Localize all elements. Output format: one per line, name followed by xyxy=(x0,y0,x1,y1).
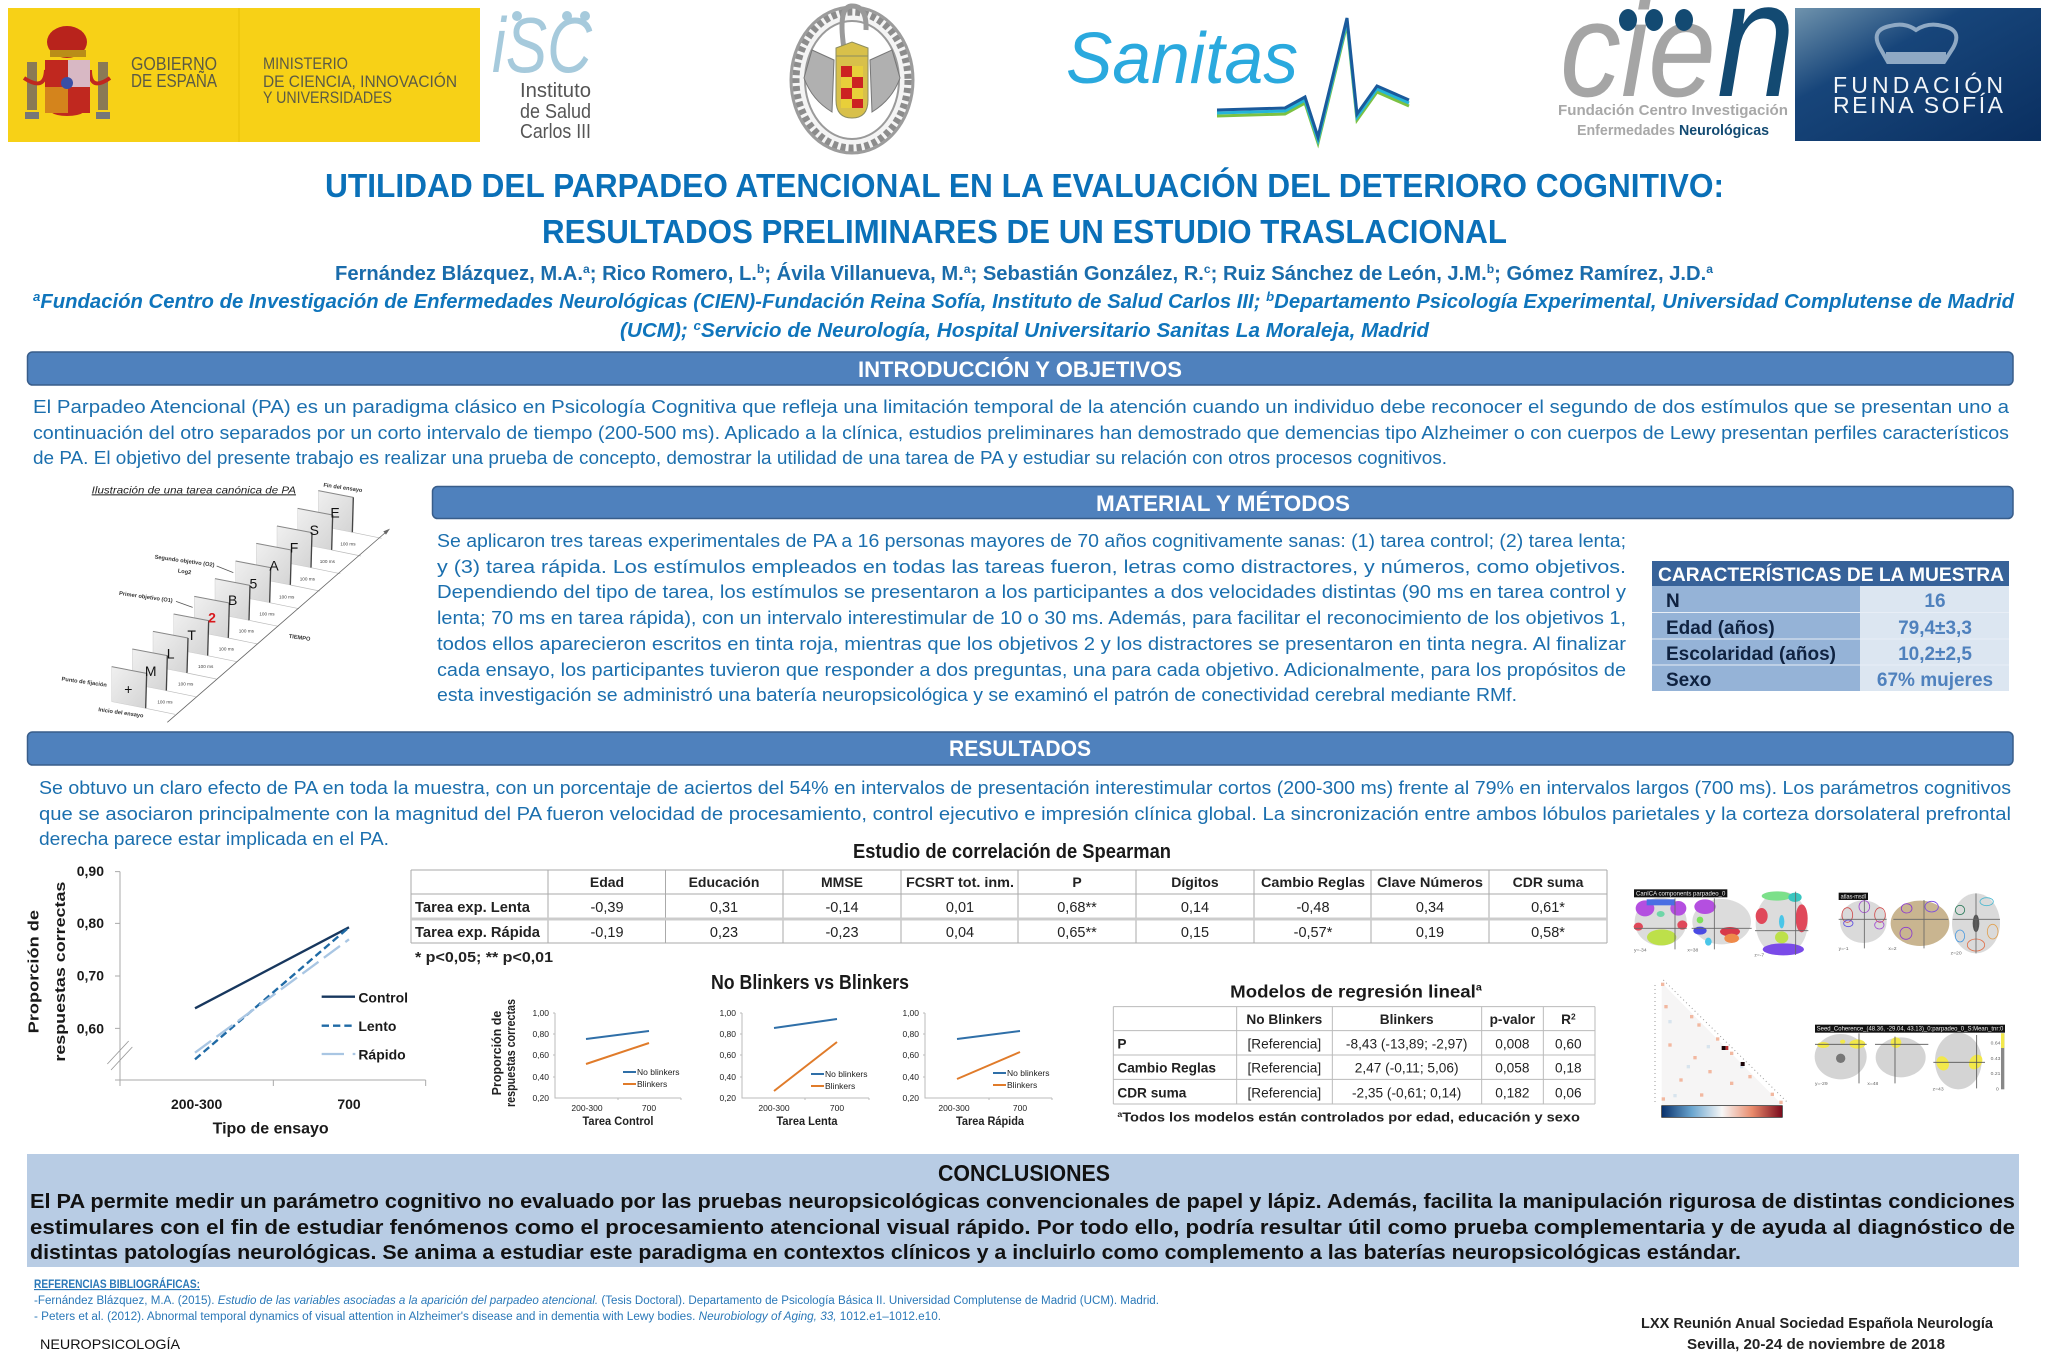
illustration: tarea canónica de PA: Log2 xyxy=(177,568,192,576)
text: introducción xyxy=(33,396,2010,468)
text: resultados: que se asociaron principalmente con la magnitud del PA fueron velocidad de procesamiento, control ejecutivo e impresión clínica global. La sincronización entre ambos lóbulos parietales y la corteza dorsolateral prefrontal xyxy=(39,803,2011,824)
table: correlación de Spearman: Clave Números xyxy=(1377,874,1483,890)
line chart: proporción de respuestas correctas: 0,60 xyxy=(77,1020,104,1036)
line chart: proporción de respuestas correctas xyxy=(26,863,426,1137)
table: correlación de Spearman: -0,23 xyxy=(825,925,859,941)
table: correlación de Spearman: -0,57* xyxy=(1294,925,1333,941)
chart: tarea lenta: 1,00 xyxy=(719,1008,736,1018)
line chart: proporción de respuestas correctas: Control xyxy=(358,990,408,1006)
label: reunión anual: Sevilla, 20-24 de noviembre de 2018 xyxy=(1687,1336,1945,1353)
authors: a xyxy=(964,262,971,276)
table: modelos de regresión lineal: [Referencia] xyxy=(1248,1061,1321,1076)
line chart: proporción de respuestas correctas: 0,80 xyxy=(77,915,104,931)
table: modelos de regresión lineal: 2,47 (-0,11; 5,06) xyxy=(1355,1061,1459,1076)
heading: material y métodos: MATERIAL Y MÉTODOS xyxy=(1096,491,1350,516)
logo: Fundación Reina Sofía: FUNDACIÓN xyxy=(1833,72,2003,98)
chart axis title: proporción xyxy=(490,999,518,1107)
line chart: proporción de respuestas correctas: 0,70 xyxy=(77,968,104,984)
heading: introducción xyxy=(28,352,2013,385)
heading: resultados xyxy=(28,732,2013,765)
authors: ; Gómez Ramírez, J.D. xyxy=(1494,263,1706,285)
title: UTILIDAD DEL PARPADEO ATENCIONAL EN LA EVALUACIÓN DEL DETERIORO COGNITIVO: xyxy=(325,167,1724,204)
table: modelos de regresión lineal: -2,35 (-0,61; 0,14) xyxy=(1352,1085,1461,1100)
table: correlación de Spearman: -0,39 xyxy=(590,900,624,916)
text: introducción: de PA. El objetivo del presente trabajo es realizar una prueba de concepto, demostrar la utilidad de una tarea de PA y estudiar su relación con otros procesos cognitivos. xyxy=(33,447,1447,468)
table: correlación de Spearman: 0,04 xyxy=(946,925,974,941)
title: RESULTADOS PRELIMINARES DE UN ESTUDIO TRASLACIONAL xyxy=(542,213,1507,250)
label: reunión anual: LXX Reunión Anual Sociedad Española Neurología xyxy=(1641,1315,1994,1332)
figure: CanICA components: y=-34 xyxy=(1634,947,1647,953)
table: modelos de regresión lineal: [Referencia] xyxy=(1248,1036,1321,1051)
chart: tarea rápida: Blinkers xyxy=(1007,1080,1037,1090)
affiliations: c xyxy=(694,318,702,333)
authors: ; Ruiz Sánchez de León, J.M. xyxy=(1211,263,1487,285)
table: correlación de Spearman: 0,01 xyxy=(946,900,974,916)
table: correlación de Spearman: 0,61* xyxy=(1531,900,1565,916)
text: métodos: y (3) tarea rápida. Los estímulos empleados en todas las tareas fueron, letras como distractores, y números, como objetivos. xyxy=(437,556,1626,577)
figure: seed coherence: 0.43 xyxy=(1991,1056,2001,1062)
logo: Gobierno de España, Ministerio de Ciencia: MINISTERIO xyxy=(263,54,348,73)
text: conclusiones: distintas patologías neurológicas. Se anima a estudiar este paradigma en contextos clínicos y a incluirlo como complemento a las baterías neuropsicológicas estándar. xyxy=(30,1242,1741,1264)
text: métodos: Se aplicaron tres tareas experimentales de PA a 16 personas mayores de 70 años cognitivamente sanas: (1) tarea control; (2) tarea lenta; xyxy=(437,530,1626,551)
table: correlación de Spearman: -0,14 xyxy=(825,900,859,916)
table: modelos de regresión lineal: CDR suma xyxy=(1117,1085,1187,1100)
chart: tarea rápida: 0,20 xyxy=(902,1093,919,1103)
chart: tarea rápida xyxy=(902,1008,1052,1128)
chart: tarea rápida: 0,40 xyxy=(902,1072,919,1082)
illustration: tarea canónica de PA: TIEMPO xyxy=(288,634,311,643)
table: modelos de regresión lineal: No Blinkers xyxy=(1246,1012,1323,1027)
figure: CanICA components xyxy=(1634,889,1808,959)
illustration: tarea canónica de PA: 100 ms xyxy=(219,646,235,651)
table: modelos de regresión lineal: 0,60 xyxy=(1555,1036,1582,1051)
illustration: tarea canónica de PA: 2 xyxy=(208,610,216,626)
table: modelos de regresión lineal: 0,06 xyxy=(1555,1085,1582,1100)
table: modelos de regresión lineal: Modelos de regresión lineal xyxy=(1230,981,1458,1001)
illustration: tarea canónica de PA: Fin del ensayo xyxy=(323,483,363,494)
logo: Instituto de Salud Carlos III xyxy=(492,1,593,143)
logo: Sanitas: Sanitas xyxy=(1066,19,1298,99)
table: correlación de Spearman: Tarea exp. Rápida xyxy=(415,924,541,941)
text: conclusiones: estimulares con el fin de estudiar fenómenos como el procesamiento atencional visual rápido. Por todo ello, podría resultar útil como prueba complementaria y de ayuda al diagnóstico de xyxy=(30,1217,2015,1239)
figure: CanICA components: x=38 xyxy=(1687,947,1699,953)
chart: tarea rápida: 0,60 xyxy=(902,1050,919,1060)
text: resultados xyxy=(39,777,2011,849)
affiliations: Servicio de Neurología, Hospital Universitario Sanitas La Moraleja, Madrid xyxy=(701,320,1430,342)
table: modelos de regresión lineal xyxy=(1113,981,1595,1125)
title xyxy=(325,167,1724,250)
illustration: tarea canónica de PA: + xyxy=(124,681,132,697)
table: correlación de Spearman: Dígitos xyxy=(1171,874,1219,890)
table: modelos de regresión lineal: 0,18 xyxy=(1555,1061,1582,1076)
figure: seed coherence: 0.21 xyxy=(1991,1071,2001,1077)
figure: CanICA components: z=-7 xyxy=(1754,953,1764,959)
logo: Gobierno de España, Ministerio de Ciencia: GOBIERNO xyxy=(131,54,217,74)
table: características de la muestra: Sexo xyxy=(1666,670,1711,691)
table: modelos de regresión lineal: R xyxy=(1561,1012,1571,1027)
chart: tarea control: 0,40 xyxy=(532,1072,549,1082)
references: REFERENCIAS BIBLIOGRÁFICAS: xyxy=(34,1278,200,1291)
table: correlación de Spearman xyxy=(411,870,1607,943)
table: modelos de regresión lineal: Cambio Reglas xyxy=(1117,1061,1216,1076)
illustration: tarea canónica de PA: 100 ms xyxy=(320,559,336,564)
table: características de la muestra: N xyxy=(1666,591,1680,612)
label: reunión anual xyxy=(1641,1315,1994,1353)
text: métodos: Dependiendo del tipo de tarea, los estímulos se presentaron a los participantes a dos velocidades distintas (90 ms en tarea control y xyxy=(437,581,1627,602)
chart: tarea control xyxy=(532,1008,681,1128)
chart: tarea control: No blinkers xyxy=(637,1067,680,1077)
panel: introducción y objetivos xyxy=(28,352,2013,468)
heading: conclusiones: CONCLUSIONES xyxy=(938,1160,1110,1186)
line chart: proporción de respuestas correctas: respuestas correctas xyxy=(53,882,69,1062)
text: conclusiones xyxy=(30,1191,2015,1264)
text: métodos: lenta; 70 ms en tarea rápida), con un intervalo interestimular de 10 o 30 ms. Además, para facilitar el reconocimiento de los objetivos 1, xyxy=(437,607,1626,628)
illustration: tarea canónica de PA: Punto de fijación xyxy=(61,677,108,689)
authors: a xyxy=(583,262,590,276)
chart: tarea lenta: 200-300 xyxy=(758,1103,790,1113)
figure: atlas-msdl xyxy=(1839,893,2000,957)
illustration: tarea canónica de PA: B xyxy=(228,592,237,608)
table: correlación de Spearman: 0,65** xyxy=(1057,925,1097,941)
illustration: tarea canónica de PA: 100 ms xyxy=(279,594,295,599)
chart: tarea control: Blinkers xyxy=(637,1079,667,1089)
line chart: proporción de respuestas correctas: 0,90 xyxy=(77,863,104,879)
table: características de la muestra: CARACTERÍSTICAS DE LA MUESTRA xyxy=(1658,564,2004,586)
table: modelos de regresión lineal: -8,43 (-13,89; -2,97) xyxy=(1346,1036,1467,1051)
table: características de la muestra: Edad (años) xyxy=(1666,618,1775,639)
table: correlación de Spearman: MMSE xyxy=(821,874,863,890)
table: modelos de regresión lineal: 0,058 xyxy=(1495,1061,1529,1076)
authors: c xyxy=(1204,262,1211,276)
text: métodos: esta investigación se administró una batería neuropsicológica y se examinó el patrón de conectividad cerebral mediante RMf. xyxy=(437,684,1517,705)
table: correlación de Spearman: CDR suma xyxy=(1513,874,1584,890)
table: correlación de Spearman: 0,68** xyxy=(1057,900,1097,916)
heading: introducción: INTRODUCCIÓN Y OBJETIVOS xyxy=(858,357,1182,382)
authors: Fernández Blázquez, M.A. xyxy=(335,263,581,285)
references: - Peters et al. (2012). Abnormal temporal dynamics of visual attention in Alzheimer's disease and in dementia with Lewy bodies. Neurobiology of Aging, 33, 1012.e1–1012.e10. xyxy=(34,1311,941,1323)
figures: neuroimagen xyxy=(1634,889,2005,1117)
affiliations: a xyxy=(33,289,40,304)
illustration: tarea canónica de PA: 100 ms xyxy=(300,577,316,582)
figure: seed coherence xyxy=(1815,1025,2005,1093)
figure: atlas-msdl: atlas-msdl xyxy=(1841,894,1866,900)
table: correlación de Spearman: 0,14 xyxy=(1181,900,1209,916)
figure: seed coherence: z=43 xyxy=(1933,1087,1944,1093)
table: correlación de Spearman: 0,31 xyxy=(710,900,738,916)
table: modelos de regresión lineal: 0,182 xyxy=(1495,1085,1529,1100)
table: modelos de regresión lineal: a xyxy=(1476,983,1482,994)
table: modelos de regresión lineal: a xyxy=(1117,1110,1123,1119)
panel: resultados xyxy=(28,732,2013,849)
figure: CanICA components: CanICA components parpadeo_0 xyxy=(1636,890,1726,897)
chart: tarea control: 0,20 xyxy=(532,1093,549,1103)
table: modelos de regresión lineal: Blinkers xyxy=(1380,1012,1434,1027)
heading: resultados: RESULTADOS xyxy=(949,736,1091,761)
table: características de la muestra: 10,2±2,5 xyxy=(1898,644,1972,665)
illustration: tarea canónica de PA: 100 ms xyxy=(239,629,255,634)
table: correlación de Spearman: 0,34 xyxy=(1416,900,1444,916)
heading: material y métodos xyxy=(432,486,2013,518)
chart: tarea lenta: 700 xyxy=(830,1103,844,1113)
table: características de la muestra: 67% mujeres xyxy=(1877,670,1993,691)
authors: b xyxy=(1487,262,1494,276)
illustration: tarea canónica de PA: Segundo objetivo (O2) xyxy=(154,555,215,569)
affiliations: Fundación Centro de Investigación de Enfermedades Neurológicas (CIEN)-Fundación Reina Sofía, Instituto de Salud Carlos III; xyxy=(40,291,1266,313)
line chart: proporción de respuestas correctas: Rápido xyxy=(358,1046,406,1062)
references xyxy=(34,1278,1159,1323)
chart: tarea control: 0,80 xyxy=(532,1029,549,1039)
table: correlación de Spearman: Edad xyxy=(590,874,624,890)
chart: tarea lenta: 0,80 xyxy=(719,1029,736,1039)
chart: tarea control: 200-300 xyxy=(571,1103,603,1113)
figure: atlas-msdl: y=-1 xyxy=(1839,946,1849,952)
table: modelos de regresión lineal: 0,008 xyxy=(1495,1036,1529,1051)
affiliations: b xyxy=(1266,289,1274,304)
illustration: tarea canónica de PA: 5 xyxy=(249,575,257,591)
text: métodos: cada ensayo, los participantes tuvieron que responder a dos preguntas, una para cada objetivo. Adicionalmente, para los propósitos de xyxy=(437,659,1626,680)
figure: atlas-msdl: z=20 xyxy=(1951,951,1962,957)
logo: CIEN: Enfermedades xyxy=(1577,122,1675,139)
chart: tarea lenta: 0,60 xyxy=(719,1050,736,1060)
figure: seed coherence: y=-29 xyxy=(1815,1081,1828,1087)
logo: Gobierno de España, Ministerio de Ciencia xyxy=(8,8,480,142)
figure: matriz de correlación xyxy=(1655,980,1787,1117)
authors: b xyxy=(757,262,764,276)
table: correlación de Spearman: Cambio Reglas xyxy=(1261,874,1365,890)
chart: tarea lenta xyxy=(719,1008,869,1128)
logo: CIEN: Fundación Centro Investigación xyxy=(1558,102,1788,119)
illustration: tarea canónica de PA: Primer objetivo (O1) xyxy=(119,591,173,604)
illustration: tarea canónica de PA: L xyxy=(167,645,175,661)
chart: tarea rápida: 700 xyxy=(1013,1103,1027,1113)
illustration: tarea canónica de PA: 100 ms xyxy=(178,682,194,687)
logo: Instituto de Salud Carlos III: Instituto xyxy=(520,80,591,102)
affiliations xyxy=(33,289,2015,342)
affiliations: (UCM); xyxy=(620,320,686,342)
figure: seed coherence: Seed_Coherence_(48.36, -29.04, 43.13)_0:parpadeo_0_S:Mean_tnr:0 xyxy=(1817,1027,2004,1033)
footnote: significación: * p<0,05; ** p<0,01 xyxy=(415,949,553,966)
figure: seed coherence: 0.64 xyxy=(1991,1041,2001,1047)
table: correlación de Spearman: 0,19 xyxy=(1416,925,1444,941)
table: correlación de Spearman: 0,15 xyxy=(1181,925,1209,941)
text: resultados: Se obtuvo un claro efecto de PA en toda la muestra, con un porcentaje de aciertos del 54% en intervalos de presentación interestimular cortos (200-300 ms) frente al 79% en intervalos largos (700 ms). Los parámetros cognitivos xyxy=(39,777,2011,798)
chart: tarea rápida: 1,00 xyxy=(902,1008,919,1018)
text: introducción: continuación del otro separados por un corto intervalo de tiempo (200-500 ms). Aplicado a la clínica, estudios preliminares han demostrado que demencias tipo Alzheimer o con cuerpos de Lewy presentan perfiles característicos xyxy=(33,422,2009,443)
figure: seed coherence: 0 xyxy=(1996,1087,1999,1093)
chart: tarea control: 700 xyxy=(642,1103,656,1113)
figure: atlas-msdl: x=2 xyxy=(1888,946,1897,952)
chart: tarea control: Tarea Control xyxy=(582,1116,654,1128)
logo: Gobierno de España, Ministerio de Ciencia: DE ESPAÑA xyxy=(131,70,217,91)
chart: tarea rápida: Tarea Rápida xyxy=(956,1116,1025,1128)
table: modelos de regresión lineal: Todos los modelos están controlados por edad, educación y sexo xyxy=(1122,1110,1580,1125)
references: -Fernández Blázquez, M.A. (2015). Estudio de las variables asociadas a la aparición del parpadeo atencional. (Tesis Doctoral). Departamento de Psicología Básica II. Universidad Complutense de Madrid (UCM). Madrid. xyxy=(34,1295,1159,1307)
table: características de la muestra: Escolaridad (años) xyxy=(1666,644,1836,665)
line chart: proporción de respuestas correctas: Tipo de ensayo xyxy=(213,1120,329,1137)
illustration: tarea canónica de PA: S xyxy=(310,522,319,538)
logo: Sanitas xyxy=(1066,18,1409,143)
illustration: tarea canónica de PA: 100 ms xyxy=(157,699,173,704)
table: características de la muestra xyxy=(1652,561,2009,691)
panel: material y métodos xyxy=(432,486,2013,705)
illustration: tarea canónica de PA: M xyxy=(145,663,156,679)
logo: Universidad Complutense seal xyxy=(791,6,913,153)
logo: Fundación Reina Sofía xyxy=(1795,8,2041,141)
illustration: tarea canónica de PA: A xyxy=(269,558,279,574)
chart: tarea rápida: 200-300 xyxy=(938,1103,970,1113)
panel: conclusiones xyxy=(27,1154,2019,1267)
chart: tarea lenta: No blinkers xyxy=(825,1069,868,1079)
label: neuropsicología: NEUROPSICOLOGÍA xyxy=(40,1336,181,1352)
heading: estudio de correlación de Spearman: Estudio de correlación de Spearman xyxy=(853,841,1171,863)
table: modelos de regresión lineal: P xyxy=(1117,1036,1126,1051)
figure: seed coherence: x=48 xyxy=(1867,1081,1879,1087)
line chart: proporción de respuestas correctas: 200-300 xyxy=(171,1096,223,1112)
line chart: proporción de respuestas correctas: 700 xyxy=(337,1096,361,1112)
table: características de la muestra: 79,4±3,3 xyxy=(1898,618,1972,639)
chart axis title: proporción: respuestas correctas xyxy=(504,999,518,1107)
table: correlación de Spearman: Educación xyxy=(689,874,759,890)
line chart: proporción de respuestas correctas: Proporción de xyxy=(26,910,42,1033)
illustration: tarea canónica de PA: 100 ms xyxy=(259,611,275,616)
chart: tarea lenta: 0,20 xyxy=(719,1093,736,1103)
table: correlación de Spearman: P xyxy=(1072,874,1082,890)
text: métodos xyxy=(437,530,1627,705)
line chart: proporción de respuestas correctas: Lento xyxy=(358,1018,396,1034)
authors: a xyxy=(1706,262,1713,276)
logo: Fundación Reina Sofía: REINA SOFÍA xyxy=(1833,92,2004,118)
chart: tarea lenta: Blinkers xyxy=(825,1081,855,1091)
logo: Instituto de Salud Carlos III: Carlos III xyxy=(520,121,591,143)
text: introducción: El Parpadeo Atencional (PA) es un paradigma clásico en Psicología Cognitiva que refleja una limitación temporal de la atención cuando un individuo debe reconocer el segundo de dos estímulos que se presentan uno a xyxy=(33,396,2010,417)
table: modelos de regresión lineal: 2 xyxy=(1571,1011,1576,1021)
logo: Gobierno de España, Ministerio de Ciencia: Y UNIVERSIDADES xyxy=(263,88,392,107)
illustration: tarea canónica de PA: 100 ms xyxy=(198,664,214,669)
affiliations: Departamento Psicología Experimental, Universidad Complutense de Madrid xyxy=(1274,291,2015,313)
chart: tarea rápida: 0,80 xyxy=(902,1029,919,1039)
heading: no blinkers vs blinkers: No Blinkers vs Blinkers xyxy=(711,972,909,994)
table: características de la muestra: 16 xyxy=(1924,591,1946,612)
table: correlación de Spearman: -0,19 xyxy=(590,925,624,941)
logo: CIEN xyxy=(1558,0,1795,139)
illustration: tarea canónica de PA: T xyxy=(187,627,196,643)
chart: tarea rápida: No blinkers xyxy=(1007,1068,1050,1078)
illustration: tarea canónica de PA: F xyxy=(290,540,298,556)
chart axis title: proporción: Proporción de xyxy=(490,1011,504,1095)
authors: ; Ávila Villanueva, M. xyxy=(764,262,964,285)
table: correlación de Spearman: 0,23 xyxy=(710,925,738,941)
table: correlación de Spearman: -0,48 xyxy=(1296,900,1330,916)
logo: Gobierno de España, Ministerio de Ciencia: DE CIENCIA, INNOVACIÓN xyxy=(263,72,457,91)
chart: tarea lenta: 0,40 xyxy=(719,1072,736,1082)
logo: Instituto de Salud Carlos III: iSC xyxy=(492,1,593,89)
illustration: tarea canónica de PA: 100 ms xyxy=(340,541,356,546)
table: modelos de regresión lineal: [Referencia] xyxy=(1248,1085,1321,1100)
table: correlación de Spearman: Tarea exp. Lenta xyxy=(415,899,531,916)
table: correlación de Spearman: FCSRT tot. inm. xyxy=(906,874,1014,890)
text: métodos: todos ellos aparecieron escritos en tinta roja, mientras que los objetivos 2 y los distractores se presentaron en tinta negra. Al finalizar xyxy=(437,633,1626,654)
chart: tarea lenta: Tarea Lenta xyxy=(776,1116,838,1128)
illustration: tarea canónica de PA xyxy=(61,483,390,722)
illustration: tarea canónica de PA: Ilustración de una tarea canónica de PA xyxy=(92,485,296,496)
authors: ; Rico Romero, L. xyxy=(590,263,757,285)
logo: CIEN: Neurológicas xyxy=(1679,122,1769,139)
illustration: tarea canónica de PA: E xyxy=(330,505,340,521)
illustration: tarea canónica de PA: Inicio del ensayo xyxy=(98,707,144,720)
text: resultados: derecha parece estar implicada en el PA. xyxy=(39,828,389,849)
table: modelos de regresión lineal: p-valor xyxy=(1490,1012,1536,1027)
chart: tarea control: 1,00 xyxy=(532,1008,549,1018)
chart: tarea control: 0,60 xyxy=(532,1050,549,1060)
logo: Instituto de Salud Carlos III: de Salud xyxy=(520,101,591,123)
authors: ; Sebastián González, R. xyxy=(971,263,1204,285)
table: correlación de Spearman: 0,58* xyxy=(1531,925,1565,941)
text: conclusiones: El PA permite medir un parámetro cognitivo no evaluado por las pruebas neuropsicológicas convencionales de papel y lápiz. Además, facilita la manipulación rigurosa de distintas condiciones xyxy=(30,1191,2015,1213)
